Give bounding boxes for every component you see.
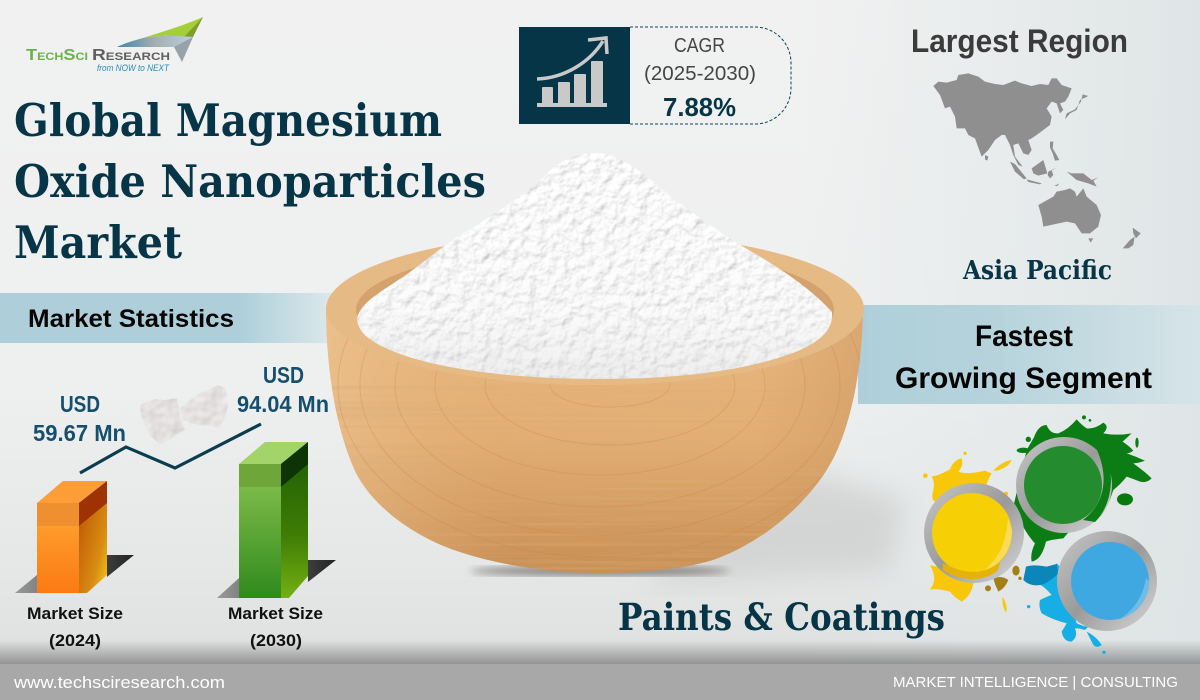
value label 2030: USD xyxy=(263,362,304,388)
panel: fastest growing segment heading: Fastest xyxy=(975,320,1073,353)
chart: market size bars xyxy=(15,362,336,650)
dark blue splash xyxy=(1023,564,1058,585)
bowl body xyxy=(326,305,863,573)
panel: largest region xyxy=(911,23,1141,286)
value label 2024: USD xyxy=(60,391,100,417)
CAGR callout: CAGR xyxy=(674,35,725,57)
connector line xyxy=(80,424,261,473)
panel: market statistics heading: Market Statistics xyxy=(28,305,234,333)
map: Asia Pacific xyxy=(933,73,1141,248)
label: market size 2024: Market Size xyxy=(27,604,123,623)
panel: largest region: Asia Pacific xyxy=(962,256,1112,286)
green splatter xyxy=(1013,415,1152,562)
yellow splatter xyxy=(923,452,1012,613)
logo: TechSci Research: TechSci xyxy=(26,47,88,64)
powder mound xyxy=(357,153,832,379)
value label 2030: 94.04 Mn xyxy=(237,391,329,417)
bowl rim xyxy=(326,233,864,385)
green can xyxy=(1016,437,1112,533)
logo: TechSci Research: Research xyxy=(92,47,170,64)
panel: largest region: Largest Region xyxy=(911,23,1128,59)
label: market size 2024: (2024) xyxy=(49,631,101,650)
title xyxy=(14,94,486,269)
panel: fastest growing segment heading xyxy=(858,305,1200,404)
yellow can xyxy=(924,483,1024,583)
label: market size 2030 xyxy=(228,604,323,650)
label: paints and coatings: Paints & Coatings xyxy=(618,595,945,639)
label: market size 2030: (2030) xyxy=(250,631,302,650)
blue can xyxy=(1057,531,1157,631)
footer bar xyxy=(0,664,1200,700)
title: Oxide Nanoparticles xyxy=(14,155,486,208)
icon: magnesium oxide rocks xyxy=(140,385,228,445)
label: market size 2024 xyxy=(27,604,123,650)
CAGR callout: 7.88% xyxy=(663,92,736,122)
icon: paint cans xyxy=(923,415,1157,654)
label: market size 2030: Market Size xyxy=(228,604,323,623)
bowl of magnesium oxide powder xyxy=(326,153,905,585)
value label 2030 xyxy=(237,362,329,417)
footer bar: MARKET INTELLIGENCE | CONSULTING xyxy=(893,674,1178,691)
value label 2024: 59.67 Mn xyxy=(33,420,126,446)
panel: fastest growing segment heading: Growing Segment xyxy=(895,362,1152,395)
CAGR callout xyxy=(519,27,791,124)
blue splatter xyxy=(1027,563,1106,654)
brown paint drops xyxy=(985,566,1022,592)
CAGR callout: (2025-2030) xyxy=(644,63,756,85)
title: Global Magnesium xyxy=(14,94,442,147)
title: Market xyxy=(14,216,182,269)
bar: 2024 orange xyxy=(15,481,134,593)
icon: growth chart xyxy=(537,38,607,107)
logo: TechSci Research xyxy=(26,17,203,73)
value label 2024 xyxy=(33,391,126,446)
footer bar: www.techsciresearch.com xyxy=(13,673,225,692)
bar: 2030 green xyxy=(217,442,336,598)
panel: market statistics heading xyxy=(0,293,332,343)
logo: TechSci Research: from NOW to NEXT xyxy=(97,63,170,73)
